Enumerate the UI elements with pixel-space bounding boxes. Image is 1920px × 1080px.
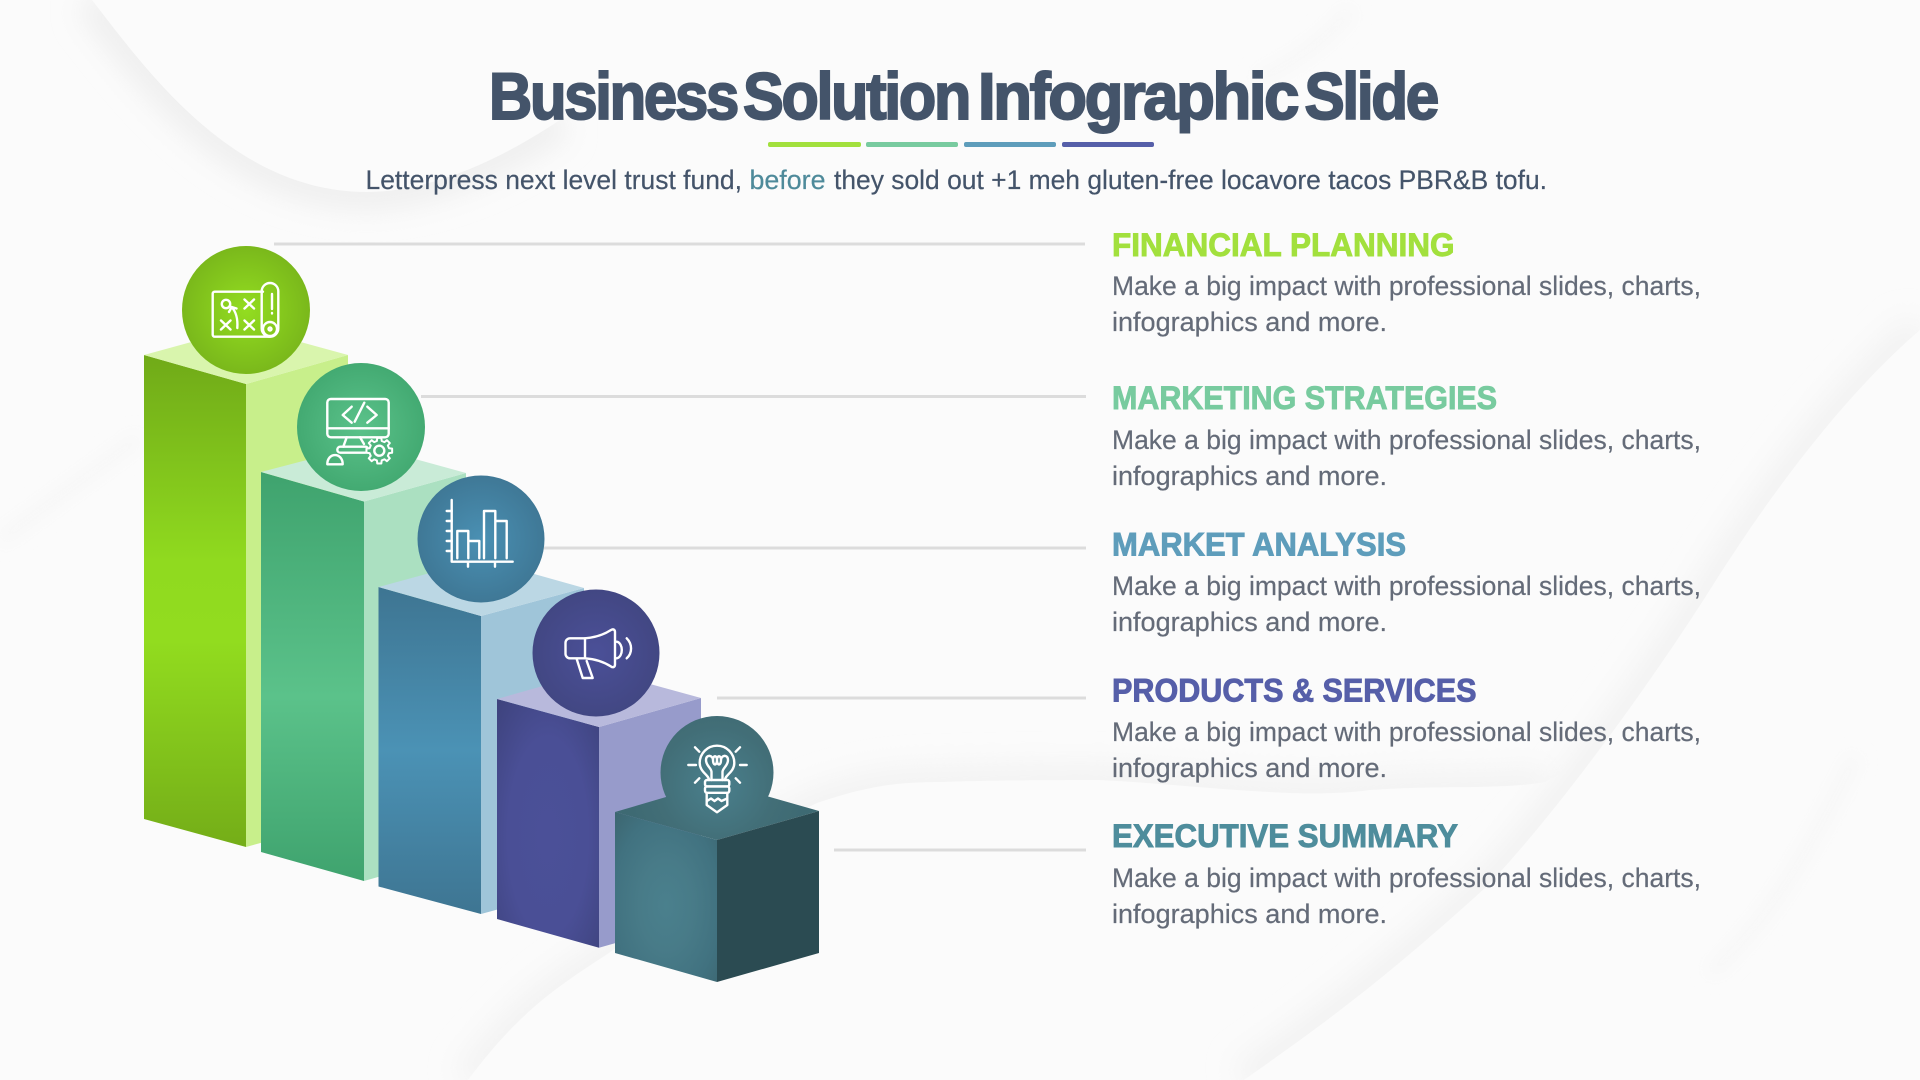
item: products and services (1112, 672, 1709, 783)
icon: megaphone (566, 629, 631, 678)
description: marketing strategies: Make a big impact with professional slides, charts, (1112, 425, 1701, 455)
item: executive summary (1112, 818, 1709, 929)
column: market analysis (378, 476, 584, 914)
heading: financial planning: FINANCIAL PLANNING (1112, 227, 1454, 263)
subtitle: before (750, 165, 826, 195)
description: market analysis: infographics and more. (1112, 607, 1387, 637)
item: financial planning (1112, 227, 1709, 337)
column: marketing strategies (261, 363, 466, 881)
icon: strategy map (213, 283, 278, 337)
heading: products and services: PRODUCTS & SERVICES (1112, 672, 1476, 708)
column: products and services (497, 590, 701, 948)
title: Solution (743, 59, 969, 133)
title underline (768, 142, 1154, 147)
column: financial planning (144, 246, 348, 847)
item: marketing strategies (1112, 380, 1709, 491)
heading: marketing strategies: MARKETING STRATEGIES (1112, 380, 1497, 416)
description: financial planning: Make a big impact with professional slides, charts, (1112, 271, 1701, 301)
title: Infographic (978, 59, 1298, 133)
item: market analysis (1112, 526, 1709, 637)
infographic slide (95, 9, 1699, 982)
description: marketing strategies: infographics and more. (1112, 461, 1387, 491)
heading: executive summary: EXECUTIVE SUMMARY (1112, 818, 1458, 854)
title: Business (489, 59, 737, 133)
title: Slide (1304, 59, 1438, 133)
description: executive summary: infographics and more. (1112, 899, 1387, 929)
subtitle: Letterpress next level trust fund, (366, 165, 742, 195)
subtitle: they sold out +1 meh gluten-free locavore tacos PBR&B tofu. (834, 165, 1547, 195)
description: executive summary: Make a big impact with professional slides, charts, (1112, 863, 1701, 893)
icon: light bulb pencil (688, 746, 747, 812)
description: products and services: Make a big impact with professional slides, charts, (1112, 717, 1701, 747)
description: market analysis: Make a big impact with professional slides, charts, (1112, 571, 1701, 601)
description: products and services: infographics and more. (1112, 753, 1387, 783)
connector lines (274, 244, 1086, 850)
column: executive summary (615, 716, 819, 982)
icon: bar chart (447, 500, 513, 567)
icon: monitor with gear (327, 399, 392, 464)
heading: market analysis: MARKET ANALYSIS (1112, 526, 1406, 562)
description: financial planning: infographics and more. (1112, 307, 1387, 337)
